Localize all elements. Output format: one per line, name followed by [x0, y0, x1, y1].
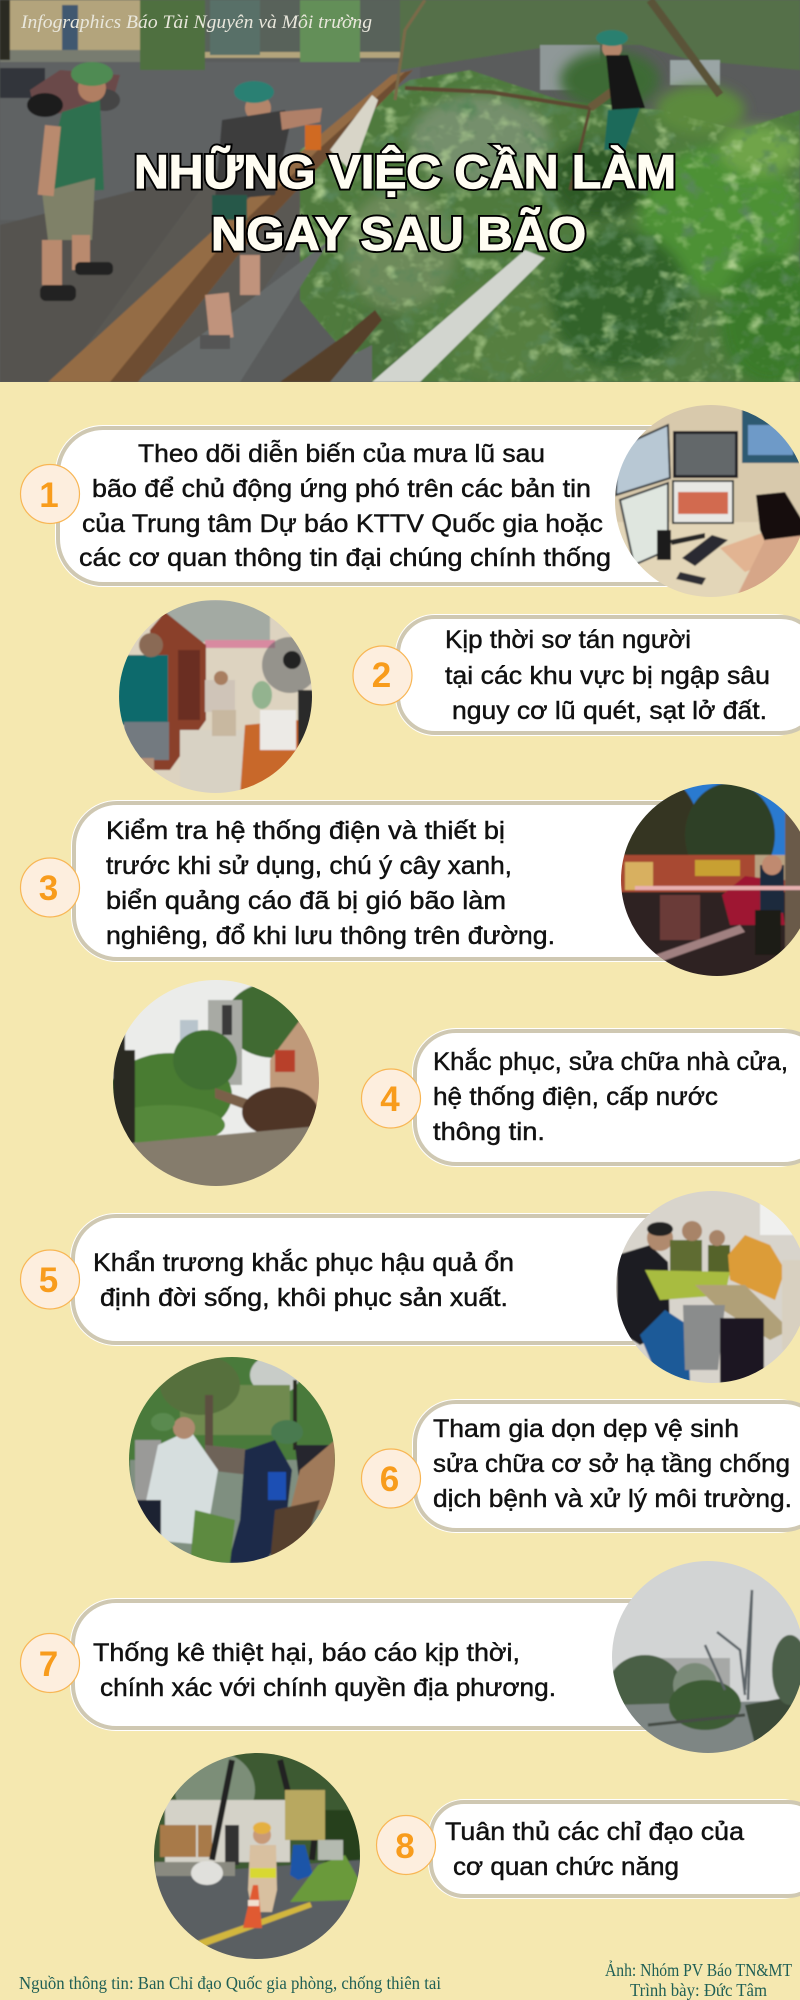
panel: step 7	[20, 1558, 800, 1760]
text 4: hệ thống điện, cấp nước	[433, 1083, 718, 1111]
motorbikes	[0, 68, 45, 98]
photo 8: traffic officer and fallen tree	[150, 1750, 365, 1965]
card 2	[395, 614, 800, 736]
text 3: Kiểm tra hệ thống điện và thiết bị	[106, 817, 505, 845]
text 3: nghiêng, đổ khi lưu thông trên đường.	[106, 922, 555, 950]
text 3: biển quảng cáo đã bị gió bão làm	[106, 887, 506, 915]
person: black shirt	[596, 30, 645, 150]
text 2	[445, 626, 770, 725]
background strip	[400, 0, 800, 70]
text 1: của Trung tâm Dự báo KTTV Quốc gia hoặc	[82, 510, 603, 538]
text 8: Tuân thủ các chỉ đạo của	[445, 1818, 744, 1846]
text 3	[106, 817, 555, 950]
card 8	[428, 1799, 800, 1899]
badge 6	[362, 1449, 420, 1508]
photo 2: moving furniture	[115, 595, 318, 795]
person: chainsaw	[200, 81, 322, 349]
photo and design credit: Trình bày: Đức Tâm	[630, 1980, 767, 2000]
panel: step 3	[20, 775, 800, 982]
text 1: Theo dõi diễn biến của mưa lũ sau	[138, 439, 545, 468]
badge 2: 2	[372, 656, 391, 695]
text 5: Khẩn trương khắc phục hậu quả ổn	[93, 1248, 514, 1277]
text 1: bão để chủ động ứng phó trên các bản tin	[92, 475, 591, 503]
photo and design credit	[605, 1960, 792, 2000]
panel: step 6	[125, 1353, 800, 1570]
text 6: sửa chữa cơ sở hạ tầng chống	[433, 1450, 790, 1478]
badge 7: 7	[39, 1645, 58, 1684]
text 4: Khắc phục, sửa chữa nhà cửa,	[433, 1047, 788, 1076]
title: NHỮNG VIỆC CẦN LÀM	[134, 145, 676, 198]
badge 5	[20, 1250, 80, 1309]
text 7: Thống kê thiệt hại, báo cáo kịp thời,	[93, 1639, 520, 1667]
badge 5: 5	[39, 1261, 58, 1300]
text 7	[93, 1639, 556, 1702]
text 6: dịch bệnh và xử lý môi trường.	[433, 1485, 792, 1513]
greenery mass	[300, 70, 800, 382]
badge 4	[362, 1069, 420, 1128]
text 4	[433, 1047, 788, 1146]
text 4: thông tin.	[433, 1118, 545, 1146]
source credit: Nguồn thông tin: Ban Chỉ đạo Quốc gia phòng, chống thiên tai	[19, 1973, 441, 1993]
title: NGAY SAU BÃO	[211, 207, 586, 260]
card 5	[70, 1213, 720, 1346]
photo 4: uprooted tree	[113, 980, 319, 1186]
trunk	[48, 70, 413, 382]
card 1	[55, 425, 715, 587]
panel: step 5	[20, 1188, 800, 1388]
text 2: tại các khu vực bị ngập sâu	[445, 662, 770, 690]
text 1	[79, 439, 611, 572]
title: NGAY SAU BÃO	[211, 207, 586, 260]
photo 6: clearing fallen tree	[125, 1353, 340, 1570]
panel: step 2	[115, 595, 800, 795]
text 5	[93, 1248, 514, 1312]
header photo: fallen tree being cut	[0, 0, 800, 385]
badge 3	[20, 858, 80, 917]
text 6	[433, 1415, 792, 1513]
badge 1	[20, 464, 80, 524]
text 1: các cơ quan thông tin đại chúng chính thống	[79, 544, 611, 572]
panel: step 1	[20, 400, 800, 607]
text 6: Tham gia dọn dẹp vệ sinh	[433, 1415, 739, 1443]
photo 7: storm damage in rain	[607, 1558, 800, 1760]
badge 8	[376, 1816, 436, 1874]
text 8	[445, 1818, 744, 1881]
badge 7	[20, 1634, 80, 1692]
card 4	[412, 1028, 800, 1167]
text 2: nguy cơ lũ quét, sạt lở đất.	[452, 697, 767, 725]
text 3: trước khi sử dụng, chú ý cây xanh,	[106, 852, 512, 880]
text 2: Kịp thời sơ tán người	[445, 626, 691, 654]
card 6	[412, 1399, 800, 1533]
card 7	[70, 1598, 720, 1731]
panel: step 4	[105, 975, 800, 1190]
photo 1: forecaster at monitors	[610, 400, 800, 607]
person: left green shirt	[38, 62, 113, 301]
text 8: cơ quan chức năng	[453, 1853, 679, 1881]
panel: step 8	[150, 1750, 800, 1965]
card 3	[71, 800, 721, 962]
text 5: định đời sống, khôi phục sản xuất.	[100, 1284, 508, 1312]
badge 3: 3	[39, 869, 58, 908]
badge 2	[353, 646, 412, 705]
badge 6: 6	[380, 1460, 399, 1499]
photo 5: relief supplies	[612, 1188, 800, 1388]
text 7: chính xác với chính quyền địa phương.	[100, 1674, 556, 1702]
title: NHỮNG VIỆC CẦN LÀM	[134, 145, 676, 198]
badge 8: 8	[395, 1827, 415, 1866]
photo 3: wet street at dusk	[621, 784, 800, 976]
badge 4: 4	[380, 1080, 400, 1119]
curb	[372, 250, 545, 382]
publisher caption: Infographics Báo Tài Nguyên và Môi trường	[20, 12, 372, 33]
badge 1: 1	[39, 476, 59, 515]
title	[134, 145, 676, 260]
